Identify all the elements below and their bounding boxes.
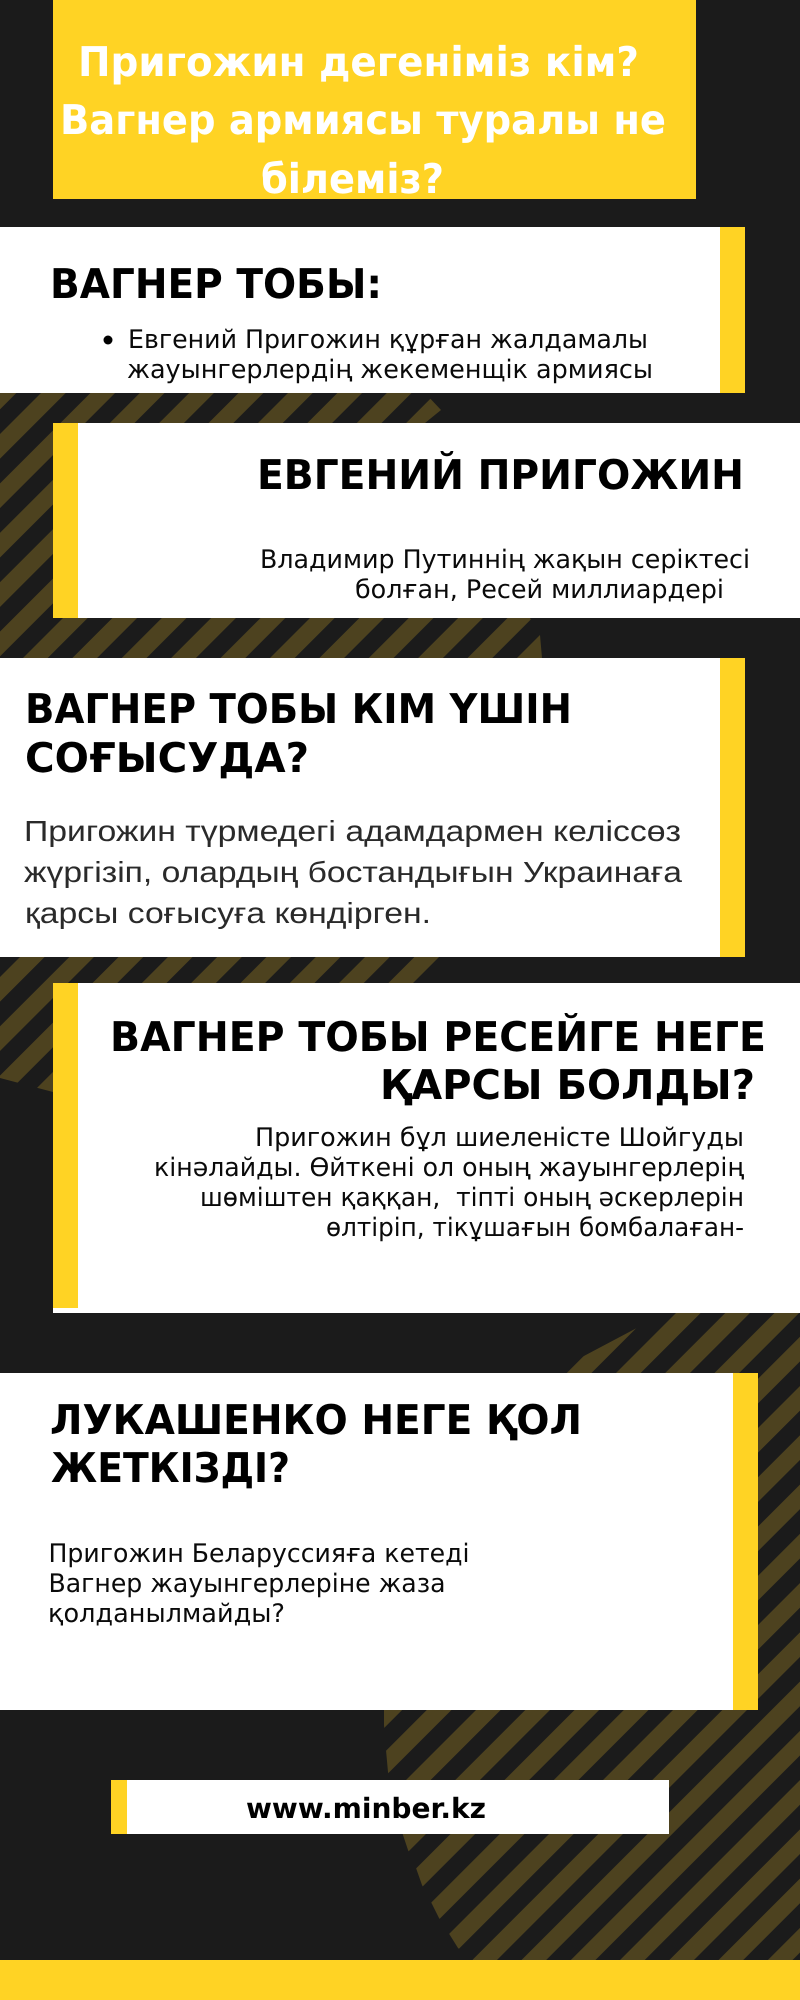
body text: болған, Ресей миллиардері	[355, 575, 724, 605]
body text	[24, 816, 683, 930]
bullet text: жауынгерлердің жекеменщік армиясы	[127, 355, 653, 385]
striped background shape: middle left	[0, 957, 440, 1092]
title text: Пригожин дегеніміз кім?	[78, 38, 639, 86]
panel: who Wagner fights for	[0, 658, 745, 957]
body text	[260, 545, 750, 605]
striped background shape: lower right	[384, 1313, 800, 1960]
bullet text: Евгений Пригожин құрған жалдамалы	[128, 325, 648, 355]
body text: Пригожин Беларуссияға кетеді	[48, 1539, 470, 1569]
panel: Lukashenko	[0, 1373, 758, 1710]
body text: жүргізіп, олардың бостандығын Украинаға	[24, 857, 683, 889]
body text: қарсы соғысуға көндірген.	[25, 898, 431, 930]
heading: why Wagner opposed Russia: ҚАРСЫ БОЛДЫ?	[380, 1061, 755, 1109]
panel: Wagner group	[0, 227, 745, 393]
title text: білеміз?	[261, 155, 444, 203]
body text: Пригожин бұл шиеленісте Шойгуды	[255, 1123, 744, 1153]
body text: Пригожин түрмедегі адамдармен келіссөз	[24, 816, 681, 848]
heading: Lukashenko: ЖЕТКІЗДІ?	[51, 1444, 290, 1492]
heading: Yevgeny Prigozhin: ЕВГЕНИЙ ПРИГОЖИН	[257, 450, 744, 499]
bottom yellow bar	[0, 1960, 800, 2000]
heading: Wagner group: ВАГНЕР ТОБЫ:	[50, 260, 382, 308]
body text: қолданылмайды?	[48, 1599, 285, 1629]
heading: why Wagner opposed Russia	[110, 1012, 766, 1109]
website address: www.minber.kz	[246, 1792, 486, 1825]
body text: Владимир Путиннің жақын серіктесі	[260, 545, 750, 575]
title text	[60, 38, 666, 203]
panel: Yevgeny Prigozhin	[53, 423, 800, 618]
body text	[154, 1123, 744, 1243]
body text: кінәлайды. Өйткені ол оның жауынгерлерің	[154, 1153, 744, 1183]
bullet text	[104, 325, 653, 385]
body text	[48, 1539, 470, 1629]
footer website box	[111, 1780, 669, 1834]
heading: Lukashenko	[50, 1396, 582, 1492]
heading: who Wagner fights for: ВАГНЕР ТОБЫ КІМ ҮШІН	[25, 685, 572, 733]
body text: шөміштен қаққан, тіпті оның әскерлерін	[200, 1183, 744, 1213]
heading: who Wagner fights for	[25, 685, 572, 782]
heading: why Wagner opposed Russia: ВАГНЕР ТОБЫ РЕСЕЙГЕ НЕГЕ	[110, 1012, 766, 1061]
striped background shape: upper left	[0, 393, 542, 658]
body text: Вагнер жауынгерлеріне жаза	[48, 1569, 446, 1599]
title banner	[53, 0, 696, 203]
panel: why Wagner opposed Russia	[53, 983, 800, 1313]
heading: Lukashenko: ЛУКАШЕНКО НЕГЕ ҚОЛ	[50, 1396, 582, 1444]
title text: Вагнер армиясы туралы не	[60, 96, 666, 144]
heading: who Wagner fights for: СОҒЫСУДА?	[25, 734, 309, 782]
body text: өлтіріп, тікұшағын бомбалаған-	[326, 1213, 744, 1243]
